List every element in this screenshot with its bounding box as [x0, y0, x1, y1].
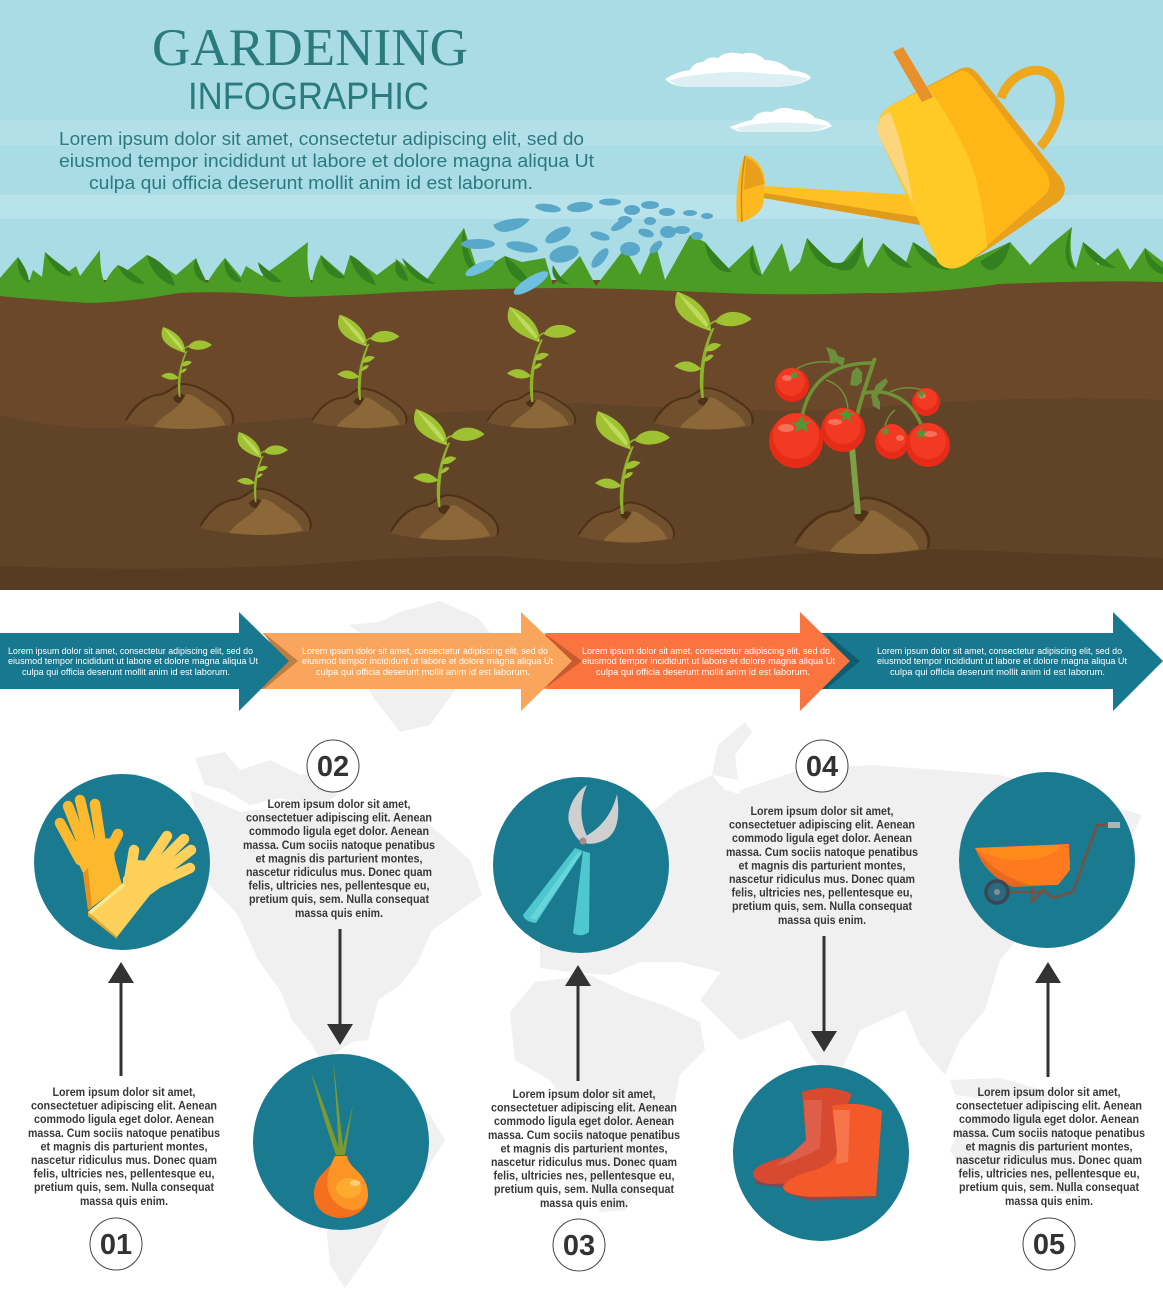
step 03: pruning shears circle	[493, 777, 669, 953]
step 02: onion circle	[253, 1054, 429, 1230]
step 05: wheelbarrow circle	[959, 772, 1135, 948]
map: Greenland	[348, 601, 496, 732]
text block 01: et magnis dis parturient montes,	[40, 1141, 208, 1153]
tomato stems	[792, 358, 925, 514]
number badge 02: 02	[317, 751, 349, 783]
text block 02: felis, ultricies nes, pellentesque eu,	[248, 881, 430, 893]
map: Africa	[510, 975, 705, 1212]
map: Australia	[950, 1105, 1095, 1195]
arrow 4: teal	[820, 612, 1163, 711]
text block 05: felis, ultricies nes, pellentesque eu,	[958, 1169, 1140, 1181]
tomato stem leaves	[826, 347, 888, 410]
text block 01: Lorem ipsum dolor sit amet,	[52, 1087, 196, 1099]
can handle	[1001, 70, 1060, 147]
text block 02: massa. Cum sociis natoque penatibus	[243, 840, 435, 852]
intro text block	[59, 129, 594, 193]
tomato plant	[769, 347, 950, 554]
text block 04: nascetur ridiculus mus. Donec quam	[729, 874, 915, 886]
grass strip	[0, 227, 1163, 303]
text block 04: massa quis enim.	[778, 915, 866, 927]
map: Scandinavia	[712, 722, 752, 780]
text block 05: nascetur ridiculus mus. Donec quam	[956, 1155, 1142, 1167]
text block 03: nascetur ridiculus mus. Donec quam	[491, 1157, 677, 1169]
map: South America	[280, 1058, 445, 1288]
map: Europe	[540, 775, 760, 975]
text block 03: commodo ligula eget dolor. Aenean	[494, 1116, 674, 1128]
connector arrow: 04 to boots	[811, 936, 837, 1052]
connector arrow: 05 to wheelbarrow	[1035, 962, 1061, 1077]
text block 01: massa. Cum sociis natoque penatibus	[28, 1128, 220, 1140]
text block 02: nascetur ridiculus mus. Donec quam	[246, 867, 432, 879]
arrow 2: light orange: eiusmod tempor incididunt ut labore et dolore magna aliqua Ut	[302, 656, 553, 666]
text block 03: pretium quis, sem. Nulla consequat	[494, 1184, 674, 1196]
can top cap	[893, 47, 933, 102]
arrow 1: teal	[0, 612, 298, 711]
icon: shear handles	[523, 848, 590, 935]
icon: shear blades	[568, 785, 618, 844]
text block 01: nascetur ridiculus mus. Donec quam	[31, 1155, 217, 1167]
text block 04: massa. Cum sociis natoque penatibus	[726, 847, 918, 859]
text block 05: et magnis dis parturient montes,	[966, 1141, 1132, 1153]
can spout	[763, 186, 920, 225]
text block 04: commodo ligula eget dolor. Aenean	[732, 833, 912, 845]
text block 05: commodo ligula eget dolor. Aenean	[959, 1114, 1139, 1126]
text block 05: pretium quis, sem. Nulla consequat	[959, 1182, 1139, 1194]
icon: onion bulb	[314, 1156, 368, 1218]
text block 01: consectetuer adipiscing elit. Aenean	[31, 1101, 217, 1113]
number badge 05: 05	[1033, 1229, 1065, 1261]
text block 01	[28, 1087, 220, 1208]
seedling 2	[311, 315, 408, 428]
arrow 1: teal: eiusmod tempor incididunt ut labore et dolore magna aliqua Ut	[8, 656, 258, 666]
step 04: boots circle	[733, 1065, 909, 1241]
text block 03	[488, 1089, 680, 1210]
icon: barrow wheel	[986, 881, 1008, 903]
text block 01: massa quis enim.	[80, 1196, 168, 1208]
arrow 3: orange-red	[545, 612, 860, 711]
text block 04: Lorem ipsum dolor sit amet,	[750, 806, 894, 818]
tomato lit faces	[773, 368, 946, 459]
arrow 4: teal: culpa qui officia deserunt mollit anim id est laborum.	[890, 667, 1105, 677]
text block 04: felis, ultricies nes, pellentesque eu,	[732, 888, 912, 900]
number badge 03	[553, 1219, 605, 1271]
tomatoes	[769, 368, 950, 468]
number badge 04: 04	[806, 751, 838, 783]
number badge 04	[796, 740, 848, 792]
text block 02: consectetuer adipiscing elit. Aenean	[246, 813, 432, 825]
sky background	[0, 0, 1163, 300]
can rose head	[736, 155, 765, 222]
tomato mound	[794, 496, 930, 554]
icon: barrow frame	[1008, 825, 1108, 902]
connector arrow: 01 to gloves	[108, 962, 134, 1076]
seedling 3	[487, 307, 576, 428]
seedling 1	[125, 327, 234, 429]
icon: back glove	[60, 800, 122, 910]
text block 05: Lorem ipsum dolor sit amet,	[978, 1087, 1120, 1099]
text block 03: consectetuer adipiscing elit. Aenean	[491, 1103, 677, 1115]
text block 05	[953, 1087, 1145, 1208]
text block 03: et magnis dis parturient montes,	[500, 1143, 668, 1155]
connector arrow: 02 to onion	[327, 929, 353, 1045]
text block 02: pretium quis, sem. Nulla consequat	[249, 894, 429, 906]
number badge 01: 01	[100, 1229, 132, 1261]
seedling 5	[199, 432, 312, 535]
text block 02: Lorem ipsum dolor sit amet,	[268, 799, 410, 811]
arrow 3: orange-red: culpa qui officia deserunt mollit anim id est laborum.	[596, 667, 810, 677]
text block 05: massa quis enim.	[1005, 1196, 1093, 1208]
arrow 2: light orange: Lorem ipsum dolor sit amet, consectetur adipiscing elit, sed do	[302, 646, 548, 656]
text block 03: Lorem ipsum dolor sit amet,	[512, 1089, 656, 1101]
arrow 3: orange-red: Lorem ipsum dolor sit amet, consectetur adipiscing elit, sed do	[582, 646, 830, 656]
number badge 01	[90, 1218, 142, 1270]
number badge 02	[307, 740, 359, 792]
cloud: large	[665, 53, 811, 87]
white lower section	[0, 590, 1163, 1300]
text block 05: massa. Cum sociis natoque penatibus	[953, 1128, 1145, 1140]
text block 04: et magnis dis parturient montes,	[738, 860, 906, 872]
map: Canadian islands	[195, 752, 345, 808]
map: Asia	[700, 765, 1142, 1085]
seedling 6	[390, 409, 499, 540]
arrow 3: orange-red: eiusmod tempor incididunt ut labore et dolore magna aliqua Ut	[582, 656, 835, 666]
number badge 05	[1023, 1218, 1075, 1270]
text block 05: consectetuer adipiscing elit. Aenean	[956, 1101, 1142, 1113]
text block 01: felis, ultricies nes, pellentesque eu,	[34, 1169, 214, 1181]
title: GARDENING: GARDENING	[152, 19, 468, 77]
text block 02: et magnis dis parturient montes,	[256, 853, 422, 865]
text block 03: massa quis enim.	[540, 1198, 628, 1210]
icon: shear pivot	[580, 838, 586, 844]
text block 01: pretium quis, sem. Nulla consequat	[34, 1182, 214, 1194]
text block 01: commodo ligula eget dolor. Aenean	[34, 1114, 214, 1126]
world map background	[190, 601, 1142, 1288]
arrow 1: teal: Lorem ipsum dolor sit amet, consectetur adipiscing elit, sed do	[8, 646, 253, 656]
arrow 2: light orange: culpa qui officia deserunt mollit anim id est laborum.	[316, 667, 530, 677]
icon: back boot	[753, 1088, 852, 1189]
map: North America	[190, 790, 482, 1062]
seedling 7	[578, 411, 675, 543]
arrow 4: teal: eiusmod tempor incididunt ut labore et dolore magna aliqua Ut	[877, 656, 1127, 666]
map: Indonesia	[950, 1078, 1050, 1104]
arrow 2: light orange	[262, 612, 582, 711]
step 01: gloves circle	[34, 774, 210, 950]
number badge 03: 03	[563, 1230, 595, 1262]
seedling 4	[653, 292, 754, 429]
text block 03: massa. Cum sociis natoque penatibus	[488, 1130, 680, 1142]
intro text block: Lorem ipsum dolor sit amet, consectetur adipiscing elit, sed do	[59, 129, 584, 149]
intro text block: eiusmod tempor incididunt ut labore et dolore magna aliqua Ut	[59, 151, 594, 171]
arrow 1: teal: culpa qui officia deserunt mollit anim id est laborum.	[22, 667, 230, 677]
icon: barrow grip	[1108, 822, 1120, 828]
text block 02: massa quis enim.	[295, 908, 383, 920]
can body	[878, 67, 1065, 269]
text block 02	[243, 799, 435, 920]
tomato calyxes	[789, 370, 928, 439]
watering can	[736, 47, 1065, 269]
watering can: water drops	[461, 198, 713, 299]
icon: barrow tray	[975, 844, 1070, 887]
text block 02: commodo ligula eget dolor. Aenean	[249, 826, 429, 838]
cloud: small	[730, 108, 832, 132]
subtitle: INFOGRAPHIC: INFOGRAPHIC	[188, 76, 429, 118]
connector arrow: 03 to shears	[565, 965, 591, 1081]
intro text block: culpa qui officia deserunt mollit anim id est laborum.	[89, 173, 533, 193]
text block 03: felis, ultricies nes, pellentesque eu,	[494, 1171, 674, 1183]
arrow 4: teal: Lorem ipsum dolor sit amet, consectetur adipiscing elit, sed do	[877, 646, 1122, 656]
text block 04	[726, 806, 918, 927]
icon: front boot	[783, 1104, 882, 1201]
icon: front glove	[88, 836, 191, 939]
tomato highlights	[778, 375, 937, 441]
text block 04: consectetuer adipiscing elit. Aenean	[729, 820, 915, 832]
icon: onion leaves	[311, 1058, 353, 1155]
text block 04: pretium quis, sem. Nulla consequat	[732, 901, 912, 913]
soil layers	[0, 280, 1163, 590]
